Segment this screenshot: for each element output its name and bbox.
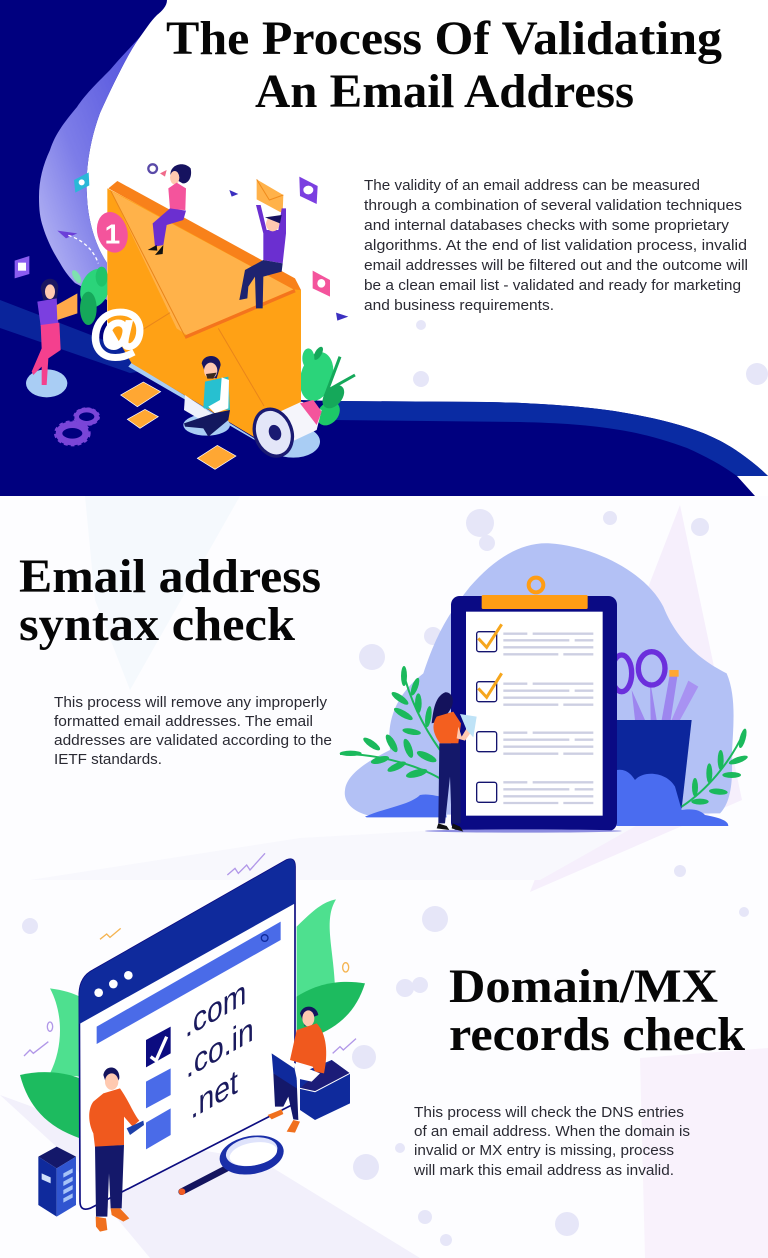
text block: introduction: The validity of an email address can be measured [364,178,700,194]
illustration: browser domain scene [20,853,365,1232]
background blob [345,543,734,815]
text block: syntax check [54,695,332,768]
figure: man with laptop [183,356,230,437]
figure: sitting woman [148,164,191,255]
text block: syntax check: IETF standards. [54,752,162,768]
icon: pencil cup [365,652,728,826]
checklist item 1 [477,624,593,654]
icon: magnifying glass [179,1131,287,1195]
text block: syntax check: formatted email addresses. The email [54,714,313,730]
heading: syntax check [19,550,321,651]
heading: domain check: records check [449,1008,745,1061]
text block: domain check [413,1105,690,1179]
icon: left branch [340,666,440,780]
icon: gears [56,409,99,445]
text block: domain check: invalid or MX entry is missing, process [414,1143,674,1159]
heading: domain check [449,960,745,1061]
heading: syntax check: Email address [19,550,321,603]
checklist item 4 [477,782,593,803]
checklist item 3 [477,732,593,754]
icon: right plant [295,345,355,430]
icon: number badge: 1 [105,218,120,249]
text block: introduction: algorithms. At the end of list validation process, invalid [364,238,747,254]
panel: hero background waves [0,0,768,496]
heading: syntax check: syntax check [19,598,295,651]
text block: introduction: be a clean email list - validated and ready for marketing [364,278,741,294]
decorative squiggles [24,853,356,1056]
figure: woman at clipboard [425,692,622,833]
icon: number badge [92,208,132,256]
figure: standing man [89,1067,144,1232]
domain labels: .com [185,973,246,1046]
icon: at sign: @ [90,301,145,364]
domain labels: .net [191,1062,239,1127]
illustration: clipboard scene [340,543,749,833]
icon: plant behind envelope [70,265,115,325]
title: The Process Of Validating [166,12,722,65]
icon: server [38,1147,76,1217]
icon: right leaves [297,899,365,1037]
figure: seated man on box [268,1007,350,1133]
heading: domain check: Domain/MX [449,960,718,1013]
text block: introduction [364,178,748,314]
figure: woman with envelope [26,279,77,397]
icon: clipboard [451,578,617,831]
text block: introduction: and internal databases checks with some proprietary [364,218,730,234]
checkbox list [146,1027,171,1149]
title [166,12,722,118]
icon: left leaves [20,988,80,1138]
icon: large envelope [107,181,301,445]
text block: introduction: and business requirements. [364,298,554,314]
domain labels: .co.in [186,1010,254,1087]
text block: syntax check: This process will remove any improperly [54,695,328,711]
icon: right branch [682,728,749,807]
icon: browser window [79,859,295,1209]
domain labels [185,973,254,1127]
panel: lower pale background [0,496,768,1258]
icon: floating app badges [15,172,348,321]
text block: domain check: This process will check the DNS entries [414,1105,684,1121]
text block: introduction: email addresses will be filtered out and the outcome will [364,258,748,274]
icon: megaphone [248,400,322,461]
title: An Email Address [255,65,634,118]
figure: person holding envelope [239,179,286,308]
illustration: envelope scene [15,164,355,469]
checklist item 2 [477,673,593,705]
text block: domain check: of an email address. When the domain is [414,1124,690,1140]
text block: domain check: will mark this email address as invalid. [413,1163,674,1179]
text block: introduction: through a combination of several validation techniques [364,198,742,214]
text block: syntax check: addresses are validated according to the [54,733,332,749]
icon: small envelopes [121,382,236,469]
